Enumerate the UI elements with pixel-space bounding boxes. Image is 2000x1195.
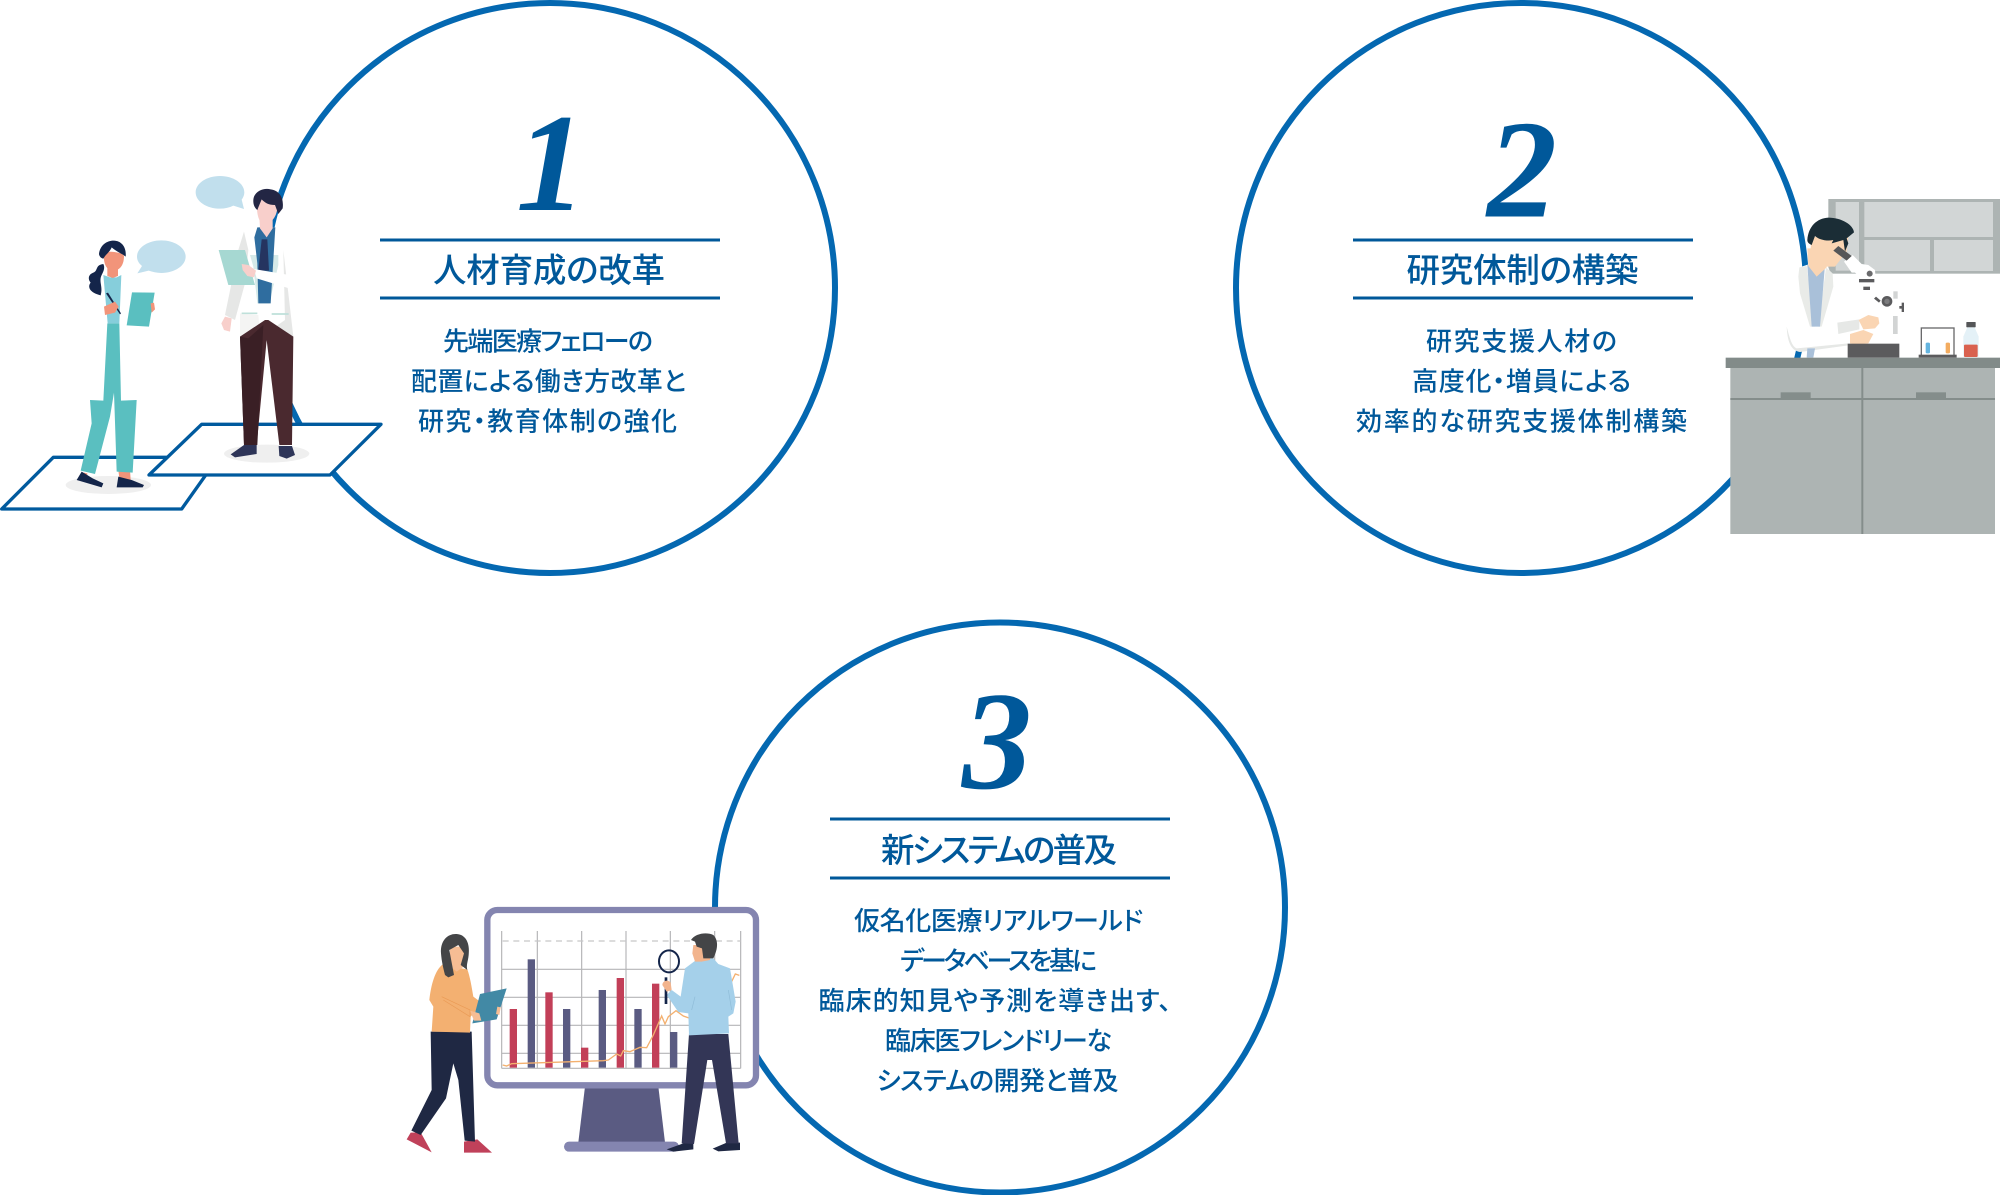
test tube rack bbox=[1919, 328, 1957, 358]
number 3: 3 bbox=[960, 664, 1032, 819]
lab bench bbox=[1726, 358, 2000, 534]
woman analyst bbox=[407, 934, 507, 1153]
shadows bbox=[66, 445, 309, 494]
description 2 bbox=[1356, 326, 1687, 436]
number 2: 2 bbox=[1485, 92, 1557, 248]
woman doctor bbox=[77, 241, 155, 487]
number 1: 1 bbox=[516, 86, 586, 241]
description 1 bbox=[411, 326, 686, 436]
speech bubble woman bbox=[137, 240, 186, 273]
monitor stand bbox=[578, 1087, 665, 1142]
reagent bottle bbox=[1963, 322, 1979, 357]
heading rules 2 bbox=[1353, 240, 1693, 298]
monitor bbox=[487, 910, 756, 1085]
description 2: 効率的な研究支援体制構築 bbox=[1356, 406, 1687, 436]
description 2: 高度化・増員による bbox=[1412, 366, 1631, 396]
description 2: 研究支援人材の bbox=[1426, 326, 1617, 356]
description 3: 臨床的知見や予測を導き出す、 bbox=[818, 986, 1172, 1016]
description 3: システムの開発と普及 bbox=[876, 1066, 1118, 1096]
panel: circle 2 bbox=[1236, 3, 1806, 573]
heading rules 3 bbox=[830, 819, 1170, 878]
man analyst bbox=[659, 933, 740, 1152]
heading 1: 人材育成の改革 bbox=[433, 253, 665, 290]
trend line bbox=[503, 974, 739, 1066]
wall cupboard bbox=[1828, 199, 2000, 274]
heading 3: 新システムの普及 bbox=[881, 833, 1117, 870]
illustration: data analysts at monitor bbox=[407, 910, 756, 1153]
bar chart bbox=[502, 931, 741, 1068]
illustration: two doctors on platforms bbox=[2, 176, 381, 509]
description 3 bbox=[818, 906, 1172, 1096]
man doctor bbox=[219, 189, 297, 459]
heading rules 1 bbox=[380, 240, 720, 298]
microscope bbox=[1833, 246, 1904, 358]
description 1: 先端医療フェローの bbox=[443, 326, 653, 356]
monitor base bbox=[564, 1142, 679, 1152]
description 3: 仮名化医療リアルワールド bbox=[854, 906, 1143, 936]
platform upper bbox=[149, 424, 381, 475]
description 1: 配置による働き方改革と bbox=[411, 366, 686, 396]
description 3: データベースを基に bbox=[900, 946, 1097, 976]
platform lower bbox=[2, 457, 218, 509]
heading 2: 研究体制の構築 bbox=[1406, 253, 1638, 290]
description 3: 臨床医フレンドリーな bbox=[885, 1026, 1112, 1056]
panel: circle 3 bbox=[715, 622, 1285, 1192]
researcher bbox=[1785, 218, 1879, 358]
panel: circle 1 bbox=[265, 3, 835, 573]
speech bubble man bbox=[196, 176, 244, 209]
description 1: 研究・教育体制の強化 bbox=[418, 406, 677, 436]
illustration: researcher with microscope bbox=[1726, 199, 2000, 534]
